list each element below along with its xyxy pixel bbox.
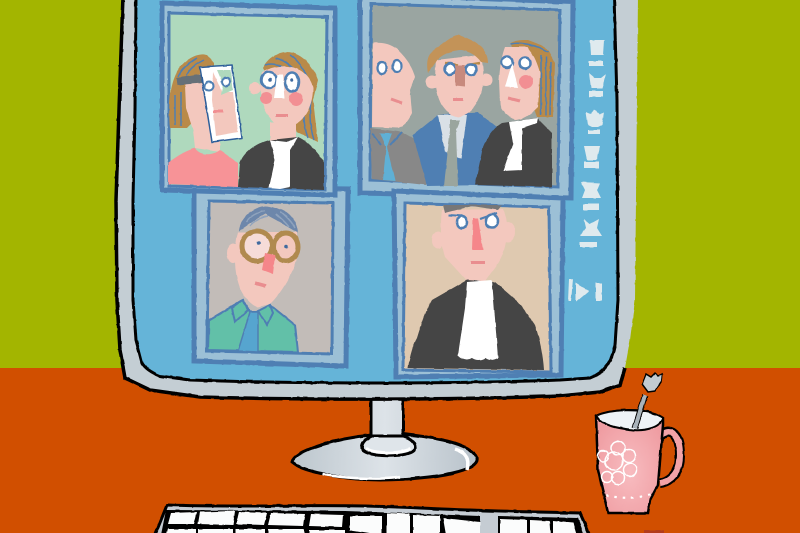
person: man in blue suit [413,35,497,186]
mug with spoon [596,373,680,513]
video panel: top left, lawyers with face shield [162,3,335,195]
monitor stand and base [292,395,477,480]
video panel: bottom right, judge [394,191,563,377]
person: woman in robe with white nose [475,40,555,187]
green wall [0,0,800,369]
person: woman with shield [168,54,242,187]
person: man with round glasses [208,206,298,352]
monitor casing [116,0,638,399]
video panel: top right, three people [360,0,573,198]
person: man in grey jacket [370,43,426,185]
monitor screen [133,0,618,383]
video panel: bottom left, man with glasses [194,187,348,366]
toolbar icons on the right of the screen [568,40,606,302]
person: woman in robe [238,52,324,190]
red object at the bottom edge [644,530,664,533]
person: judge in robe [408,205,544,370]
orange desk [0,368,800,533]
keyboard [153,505,592,533]
